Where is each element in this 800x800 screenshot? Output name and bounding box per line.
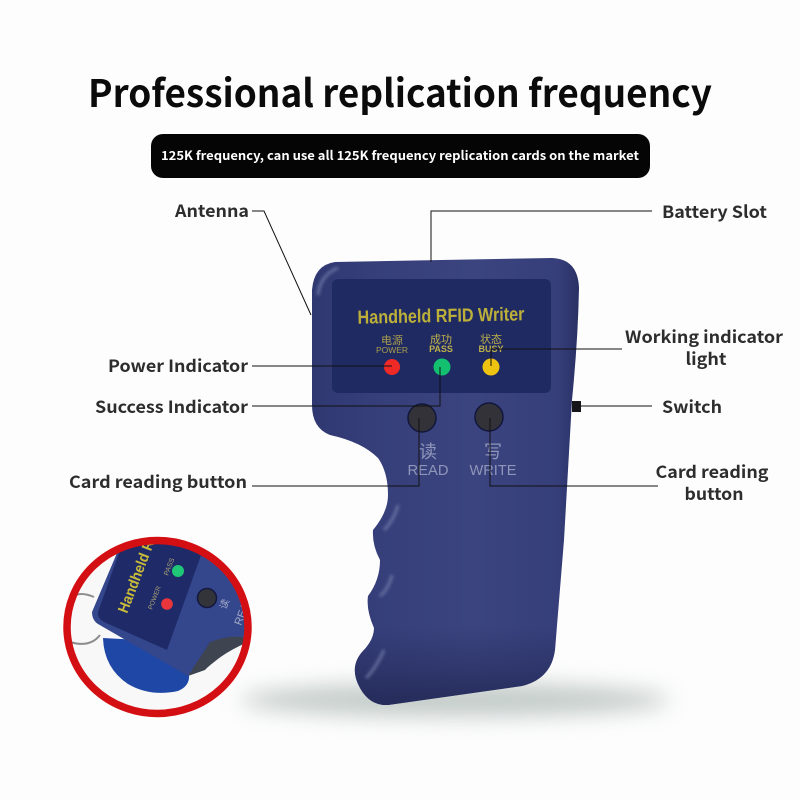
dark grip edge bbox=[188, 637, 250, 676]
read label bbox=[408, 442, 448, 479]
leader lines bbox=[252, 211, 658, 486]
white grip area bbox=[212, 644, 242, 664]
power label bbox=[376, 333, 408, 355]
inset panel bbox=[98, 544, 201, 650]
busy label bbox=[478, 332, 504, 354]
LED: busy bbox=[482, 358, 500, 376]
subtitle banner bbox=[151, 134, 650, 178]
label: working indicator light: Working indicator bbox=[625, 323, 784, 348]
pass label bbox=[429, 333, 453, 354]
label: antenna: Antenna bbox=[174, 197, 249, 222]
labels bbox=[69, 197, 784, 505]
labels: light bbox=[686, 345, 726, 370]
power label: POWER bbox=[376, 345, 408, 355]
device heading: Handheld RFID Writer bbox=[357, 304, 525, 329]
switch bbox=[572, 401, 581, 412]
inset read label: 读 bbox=[217, 597, 232, 611]
write label: 写 bbox=[484, 442, 502, 462]
label: battery slot: Battery Slot bbox=[662, 198, 767, 223]
label: switch: Switch bbox=[662, 393, 722, 418]
key ring bbox=[70, 594, 100, 644]
inset power label: POWER bbox=[147, 585, 163, 611]
label: card reading button right: Card reading bbox=[656, 458, 768, 483]
busy label: BUSY bbox=[478, 344, 504, 354]
blue tag bbox=[103, 638, 189, 693]
device shadow bbox=[240, 683, 670, 717]
read label: READ bbox=[408, 463, 448, 479]
device: handheld RFID writer bbox=[312, 258, 581, 705]
LED: pass bbox=[434, 358, 450, 376]
device in inset bbox=[92, 553, 244, 676]
subtitle banner: 125K frequency, can use all 125K frequency replication cards on the market bbox=[161, 145, 640, 164]
label panel bbox=[332, 279, 551, 393]
read button bbox=[408, 404, 436, 432]
pass label: 成功 bbox=[430, 333, 452, 346]
inset: card detail bbox=[67, 530, 262, 720]
body lower shading bbox=[312, 258, 579, 705]
LED: power bbox=[384, 359, 400, 375]
write label bbox=[470, 442, 517, 479]
power label: 电源 bbox=[381, 333, 403, 347]
busy label: 状态 bbox=[480, 332, 502, 346]
red ring bbox=[67, 540, 248, 714]
label: card reading button left: Card reading button bbox=[69, 468, 247, 493]
device body bbox=[312, 258, 579, 705]
title: Professional replication frequency bbox=[88, 63, 712, 118]
labels: button bbox=[684, 480, 744, 505]
inset heading: Handheld RF bbox=[115, 530, 161, 615]
label: power indicator: Power Indicator bbox=[108, 352, 249, 377]
inset LEDs bbox=[161, 598, 173, 610]
write button bbox=[475, 403, 503, 431]
inset: card detail: REA bbox=[233, 601, 252, 627]
inset pass label: PASS bbox=[163, 557, 176, 577]
grip highlights bbox=[318, 268, 398, 678]
pass label: PASS bbox=[429, 344, 453, 354]
inset button bbox=[198, 588, 216, 608]
read label: 读 bbox=[419, 442, 437, 462]
label: success indicator: Success Indicator bbox=[95, 393, 249, 418]
write label: WRITE bbox=[470, 463, 517, 479]
